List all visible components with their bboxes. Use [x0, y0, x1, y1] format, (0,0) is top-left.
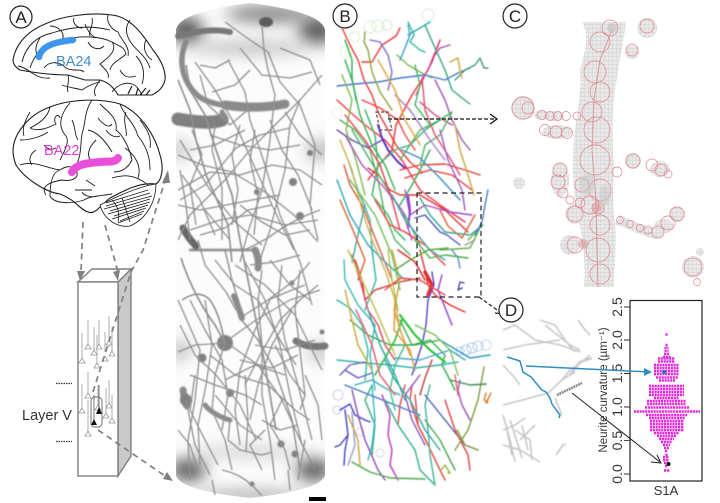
panel label B: B — [339, 7, 351, 26]
panel A: brain areas and cortical column — [10, 6, 173, 481]
beeswarm dots — [634, 334, 700, 470]
y axis ticks — [624, 307, 630, 474]
recorded black neurons with cylinder — [91, 385, 102, 427]
y axis tick labels: 0.0 — [609, 464, 625, 484]
y axis tick labels: 2.5 — [609, 297, 625, 317]
BA22 label: BA22 — [44, 143, 79, 159]
mesh surface — [511, 18, 704, 287]
dashed box and arrow to panel D — [417, 193, 503, 314]
panel C: dendrite mesh — [503, 4, 704, 287]
panel D: traced neuron and curvature plot — [499, 297, 702, 498]
highlighted low curvature neurite in grey — [557, 383, 582, 395]
arrowheads — [77, 170, 173, 481]
y axis tick labels: 1.0 — [609, 397, 625, 417]
darker mesh overlaps — [578, 23, 617, 249]
y axis tick labels — [609, 297, 625, 484]
BA22 highlight — [72, 158, 118, 172]
panel B: coloured neurite traces — [332, 4, 503, 485]
panel label C: C — [509, 7, 521, 26]
panel: microscopy image — [168, 0, 338, 503]
red wire skeleton — [512, 19, 702, 287]
blue arrow — [526, 366, 652, 376]
y axis tick labels: 1.5 — [609, 364, 625, 383]
brain lateral view BA22 — [13, 100, 162, 213]
brain medial view BA24 — [13, 14, 165, 96]
scale bar — [309, 497, 326, 501]
panel label D: D — [505, 301, 517, 320]
faint spine blobs — [332, 9, 491, 457]
dashed arrows from brain to block to image — [81, 178, 168, 478]
neuron cell bodies — [180, 17, 324, 486]
BA24 highlight — [39, 40, 73, 57]
black arrow — [572, 393, 661, 463]
curvature plot frame — [630, 300, 702, 481]
y axis tick labels: 2.0 — [609, 330, 625, 350]
thick vessels and somata — [178, 30, 325, 420]
cerebellum — [100, 184, 156, 226]
panel label C — [503, 4, 527, 28]
x axis label: S1A — [654, 483, 679, 498]
layer V boundary markers — [56, 384, 72, 442]
cylindrical image background — [176, 3, 325, 498]
layer V label: Layer V — [22, 408, 72, 424]
neurites — [178, 22, 322, 496]
highlighted blue neurite — [507, 357, 560, 418]
panel label D — [499, 298, 523, 322]
panel label A: A — [15, 8, 27, 27]
dashed box and arrow to panel C — [376, 112, 497, 130]
pyramidal neurons in column — [79, 316, 115, 436]
traces — [335, 22, 491, 485]
highlighted blue data point — [662, 370, 666, 374]
BA24 label: BA24 — [56, 54, 91, 70]
highlighted black data point — [666, 462, 670, 466]
y axis title: Neurite curvature (µm⁻¹) — [598, 327, 610, 453]
cortical column block — [78, 269, 131, 476]
y axis tick labels: 0.5 — [609, 431, 625, 450]
grey neurites — [503, 320, 592, 462]
panel label B — [333, 4, 357, 28]
panel label A — [10, 6, 32, 28]
